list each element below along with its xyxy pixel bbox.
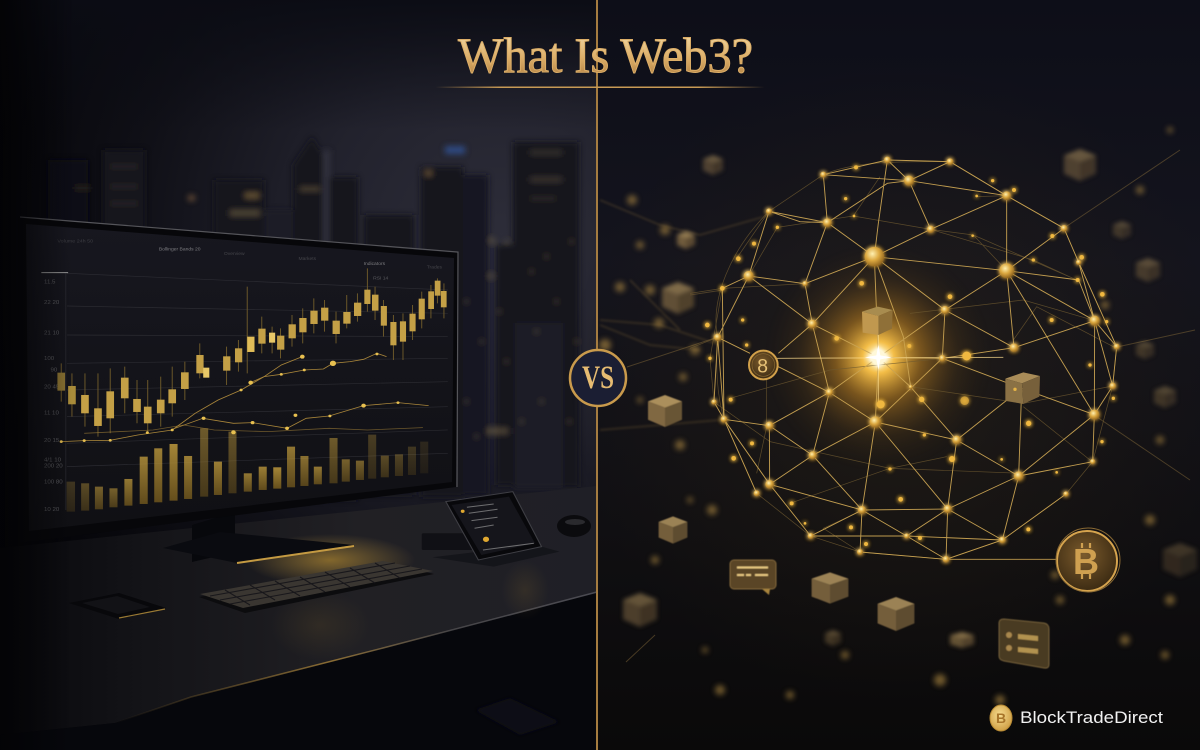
floating blocks: [648, 395, 914, 631]
background mesh: [690, 162, 1117, 559]
small gold coin: [749, 351, 778, 379]
blurred light streaks: [600, 200, 770, 430]
chart axis labels: 90: [51, 368, 57, 374]
moving average lines: [61, 353, 429, 442]
bokeh lights: [599, 127, 1175, 705]
chart axis labels: Indicators: [364, 261, 386, 266]
chart axis labels: 20 45: [44, 385, 59, 390]
desk: [0, 486, 597, 750]
chart axis labels: 10 20: [44, 507, 59, 513]
primary network links: [714, 160, 1117, 559]
chart axis labels: 20 15: [44, 438, 59, 444]
chart axis labels: 4/1 10: [44, 458, 61, 463]
trading chart: [41, 239, 448, 513]
chart axis labels: 200 20: [44, 464, 63, 469]
chart grid: [66, 273, 448, 510]
monitor screen: [26, 224, 454, 531]
chart axis labels: 11.5: [44, 280, 55, 285]
logo wordmark: BlockTradeDirect: [1020, 708, 1163, 727]
chart axis labels: Markets: [299, 256, 317, 261]
central glow: [765, 244, 992, 471]
star rays: [777, 310, 1003, 407]
monitor: [18, 217, 458, 563]
hazy night sky: [0, 0, 597, 750]
network sphere: [690, 157, 1120, 563]
chart axis labels: 11 10: [44, 411, 59, 417]
block in sphere right: [1005, 372, 1040, 404]
bitcoin coin: [1056, 528, 1120, 592]
chart axis labels: Overview: [224, 251, 245, 256]
VS badge: VS: [582, 360, 614, 396]
small gold coin: 8: [757, 356, 768, 377]
faint connecting lines: [626, 150, 1195, 662]
message card: [730, 560, 776, 595]
chart axis labels: [44, 239, 443, 513]
small glowing dots: [705, 165, 1115, 546]
chart axis labels: Volume 24h 50: [57, 239, 93, 244]
chart axis labels: RSI 14: [373, 276, 389, 280]
candlesticks: [57, 281, 447, 426]
mouse: [557, 515, 591, 537]
chart axis labels: 100: [44, 356, 54, 362]
phone on desk: [69, 593, 166, 619]
monitor stand: [163, 512, 354, 563]
logo coin: [990, 705, 1012, 731]
block in sphere center: [862, 307, 893, 335]
brand logo: [990, 705, 1163, 731]
title: What Is Web3?: [458, 27, 753, 83]
chart axis labels: 21 10: [44, 331, 59, 336]
monitor bezel: [18, 217, 458, 543]
bitcoin coin: B: [1073, 541, 1099, 582]
center divider line: [596, 0, 598, 750]
keyboard: [199, 561, 434, 613]
background haze: [570, 60, 1200, 700]
chart data points: [60, 353, 400, 443]
network nodes: [711, 157, 1120, 563]
left edge vignette: [0, 0, 597, 750]
list card: [999, 619, 1049, 668]
chart axis labels: 22 20: [44, 300, 59, 306]
left panel: traditional web trading desk: [0, 0, 597, 750]
chart axis labels: Trades: [427, 265, 443, 269]
central star: [865, 345, 892, 370]
right panel: Web3 decentralized network: [570, 0, 1200, 750]
tablet on stand: [422, 492, 560, 567]
night city skyline: [48, 137, 579, 500]
chart axis labels: Bollinger Bands 20: [159, 247, 201, 252]
VS badge: [570, 350, 626, 406]
candlestick wicks: [61, 268, 444, 437]
volume bars: [67, 428, 428, 512]
logo coin: B: [996, 710, 1006, 726]
blurred floating blocks: [623, 149, 1197, 648]
chart axis labels: 100 80: [44, 480, 63, 485]
